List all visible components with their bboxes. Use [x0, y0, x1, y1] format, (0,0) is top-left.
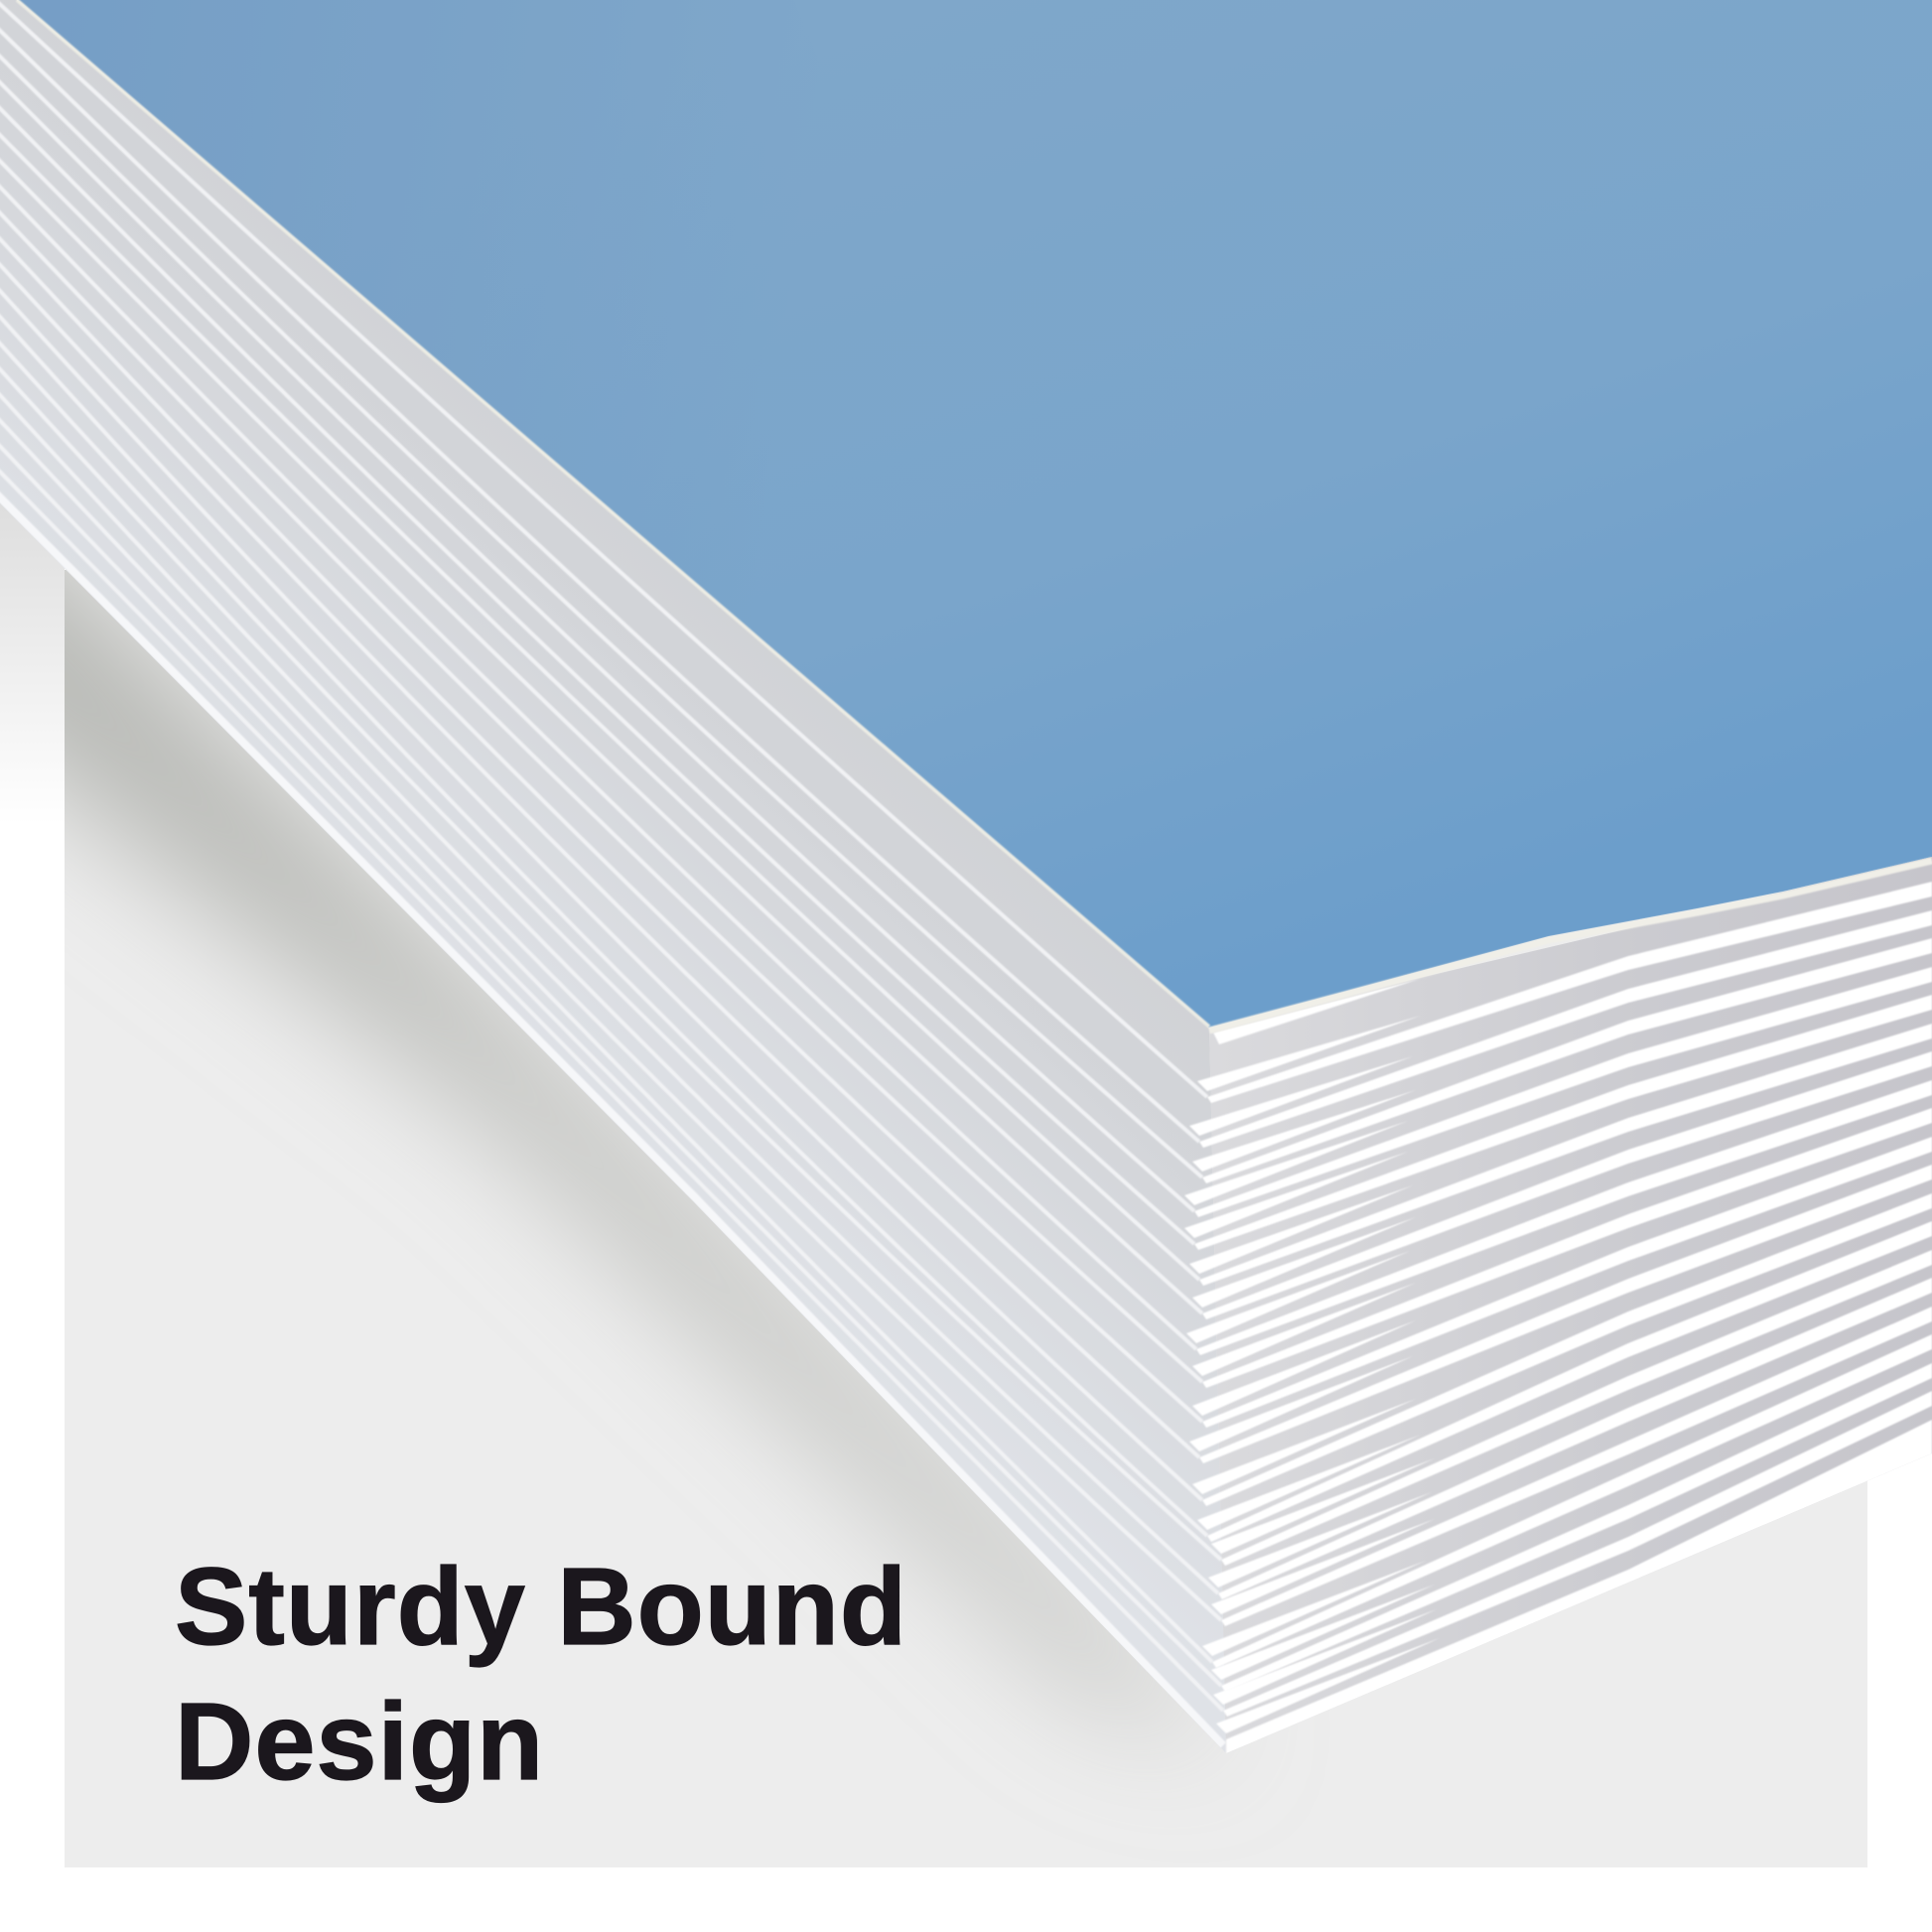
title line 2: Design — [175, 1681, 544, 1803]
right side page edges — [1184, 882, 1932, 1755]
bottom cover edge — [0, 487, 1223, 1745]
right face of stack — [1209, 857, 1932, 1753]
left side page edges — [0, 0, 1223, 1745]
left darker tint of cover — [17, 0, 1209, 1028]
stack cast shadow — [65, 570, 1187, 1742]
cover right edge highlight — [1209, 861, 1932, 1031]
right side sheet edges — [1194, 882, 1932, 1755]
cover left edge highlight — [17, 0, 1209, 1027]
right side fanned inner sheets — [1184, 979, 1440, 1733]
blue cover — [17, 0, 1932, 1031]
grey backdrop panel — [65, 570, 1867, 1867]
title — [175, 1546, 907, 1803]
left face of stack — [0, 0, 1226, 1753]
shadow strip left of panel — [0, 486, 65, 824]
title line 1: Sturdy Bound — [175, 1546, 907, 1668]
